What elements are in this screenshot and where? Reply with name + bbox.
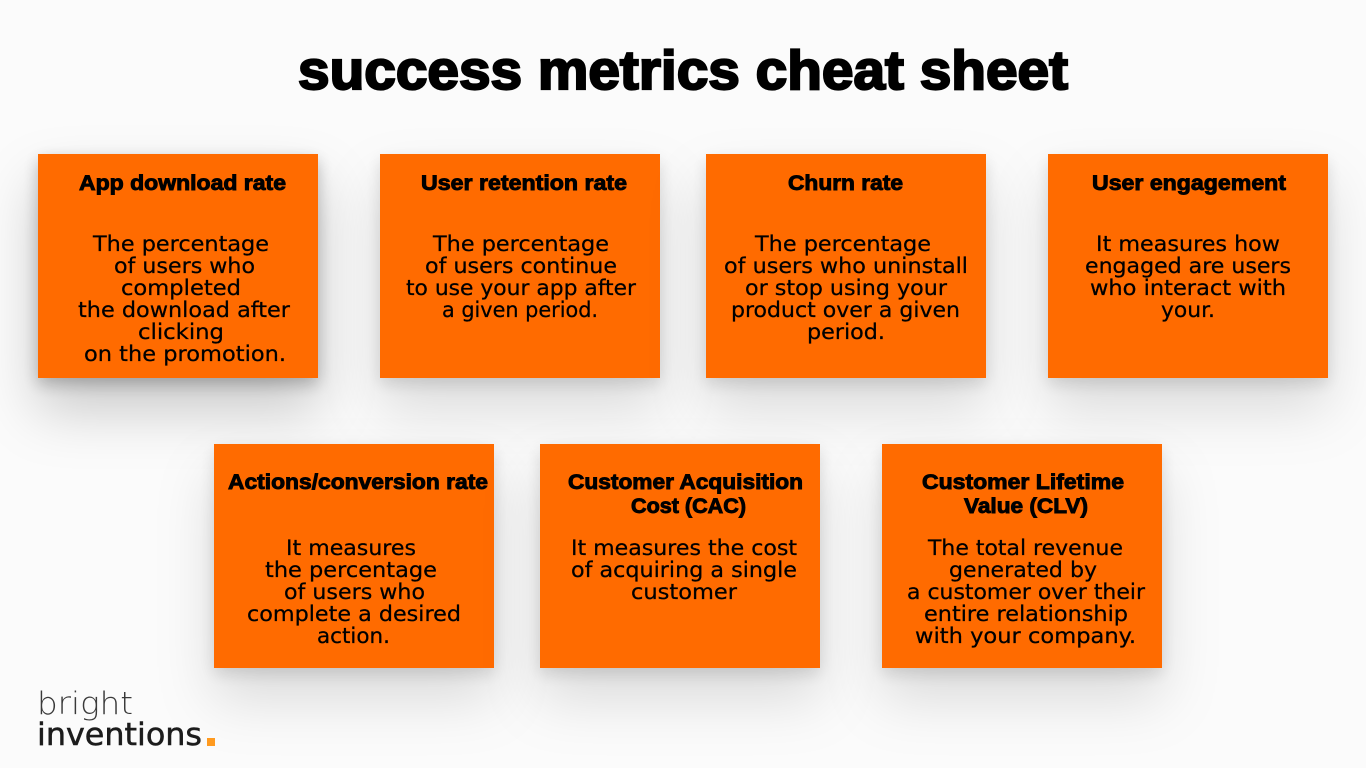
heading: Actions/conversion rate: Actions/conversion rate xyxy=(228,471,488,494)
panel: Churn rate xyxy=(706,154,986,378)
text block: Churn rate description: period. xyxy=(807,320,885,344)
text block: Customer Lifetime Value description: with your company. xyxy=(915,624,1136,648)
text block: Customer Lifetime Value description: generated by xyxy=(949,558,1097,582)
text block: Churn rate description: or stop using your xyxy=(745,276,947,300)
text block: User engagement description xyxy=(1085,232,1291,322)
heading: Customer Acquisition Cost (CAC): Customer Acquisition xyxy=(568,471,803,494)
text block: App download rate description: the download after xyxy=(78,298,290,322)
text block: User engagement description: engaged are users xyxy=(1085,254,1291,278)
text block: User engagement description: your. xyxy=(1161,298,1215,322)
heading: Churn rate: Churn rate xyxy=(788,172,903,195)
logo: bright inventions: inventions xyxy=(37,717,202,753)
heading: Customer Lifetime Value (CLV): Customer Lifetime xyxy=(922,471,1124,494)
title: success metrics cheat sheet xyxy=(298,39,1068,101)
text block: App download rate description: completed xyxy=(121,276,241,300)
panel: Customer Acquisition Cost xyxy=(540,444,820,668)
panel: App download rate xyxy=(38,154,318,378)
heading: Customer Lifetime Value (CLV) xyxy=(922,471,1124,518)
text block: Customer Lifetime Value description: a customer over their xyxy=(907,580,1145,604)
text block: User retention rate description: of users continue xyxy=(425,254,617,278)
text block: Customer Lifetime Value description: entire relationship xyxy=(924,602,1128,626)
panel: Customer Lifetime Value xyxy=(882,444,1162,668)
text block: App download rate description: of users who xyxy=(114,254,255,278)
text block: User retention rate description xyxy=(406,232,636,322)
heading: Customer Lifetime Value (CLV): Value (CLV) xyxy=(964,495,1088,518)
text block: Churn rate description: of users who uninstall xyxy=(724,254,968,278)
text block: Customer Acquisition Cost description: customer xyxy=(631,580,737,604)
text block: Customer Lifetime Value description: The total revenue xyxy=(927,536,1123,560)
text block: Customer Lifetime Value description xyxy=(907,536,1145,648)
text block: Customer Acquisition Cost description: It measures the cost xyxy=(571,536,797,560)
text block: Actions/conversion rate description: action. xyxy=(317,624,390,648)
text block: Actions/conversion rate description: It measures xyxy=(286,536,416,560)
text block: App download rate description: clicking xyxy=(138,320,224,344)
text block: User engagement description: who interact with xyxy=(1090,276,1286,300)
text block: App download rate description xyxy=(78,232,290,366)
heading: User retention rate: User retention rate xyxy=(421,172,627,195)
text block: User retention rate description: a given period. xyxy=(442,298,598,322)
text block: App download rate description: The percentage xyxy=(92,232,269,256)
text block: App download rate description: on the promotion. xyxy=(84,342,286,366)
panel: Actions/conversion rate xyxy=(214,444,494,668)
heading: Customer Acquisition Cost (CAC) xyxy=(568,471,803,518)
logo: bright inventions: bright xyxy=(37,686,133,722)
text block: Customer Acquisition Cost description xyxy=(571,536,797,604)
text block: Actions/conversion rate description xyxy=(247,536,461,648)
panel: User engagement xyxy=(1048,154,1328,378)
panel: User retention rate xyxy=(380,154,660,378)
text block: Actions/conversion rate description: complete a desired xyxy=(247,602,461,626)
heading: App download rate: App download rate xyxy=(79,172,286,195)
text block: Churn rate description: The percentage xyxy=(754,232,931,256)
text block: Customer Acquisition Cost description: of acquiring a single xyxy=(571,558,797,582)
text block: Actions/conversion rate description: of users who xyxy=(284,580,425,604)
heading: User engagement: User engagement xyxy=(1092,172,1286,195)
text block: User retention rate description: The percentage xyxy=(432,232,609,256)
logo: bright inventions xyxy=(37,686,215,753)
text block: Actions/conversion rate description: the percentage xyxy=(265,558,437,582)
text block: User retention rate description: to use your app after xyxy=(406,276,636,300)
text block: User engagement description: It measures how xyxy=(1096,232,1280,256)
text block: Churn rate description: product over a given xyxy=(731,298,960,322)
text block: Churn rate description xyxy=(724,232,968,344)
heading: Customer Acquisition Cost (CAC): Cost (CAC) xyxy=(631,495,746,518)
